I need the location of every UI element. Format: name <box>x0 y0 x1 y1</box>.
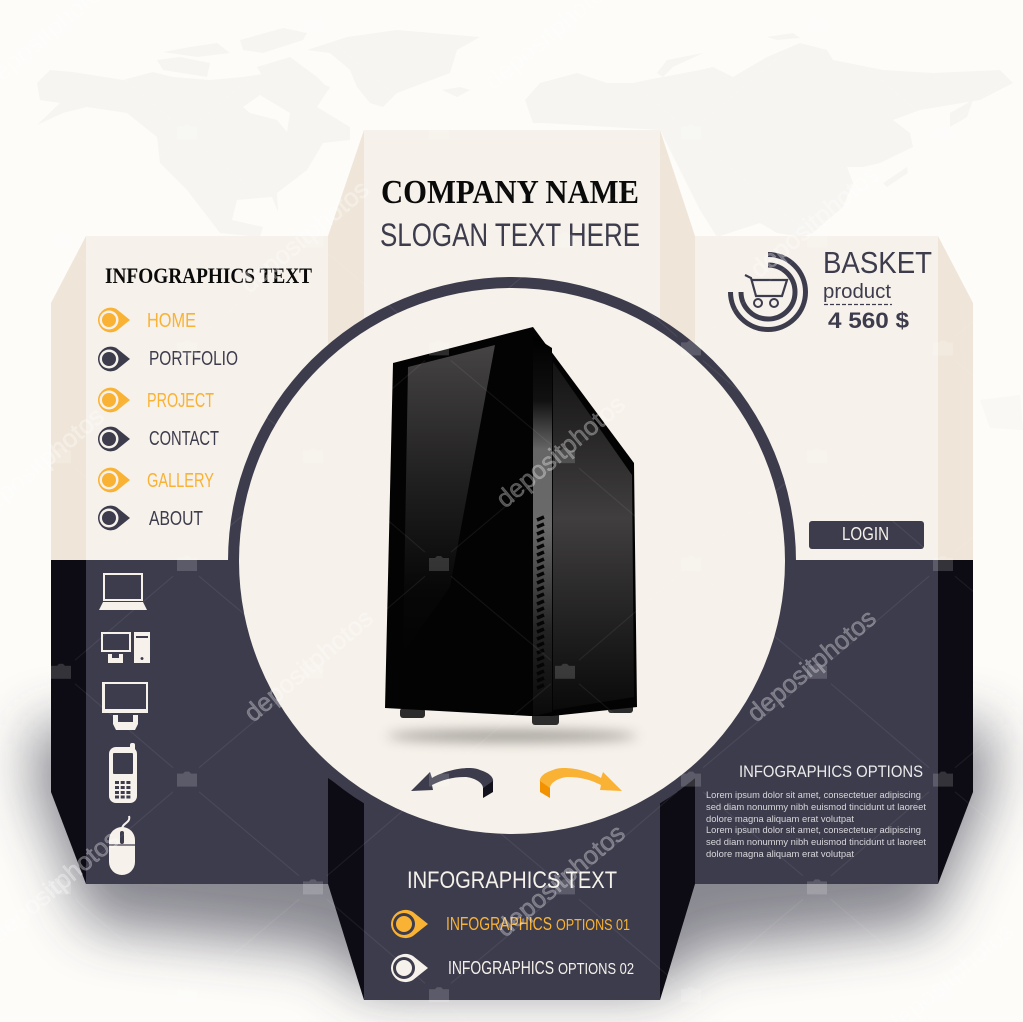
icon: monitor <box>102 682 148 730</box>
option 01: OPTIONS 01 <box>556 917 630 934</box>
computer tower <box>385 327 637 725</box>
option 02 <box>391 954 634 982</box>
hudson bay <box>243 95 290 132</box>
menu item: portfolio <box>98 347 238 371</box>
icon: shopping basket <box>730 254 806 330</box>
watermarks: depositphotos <box>491 819 631 943</box>
dashed divider <box>824 304 892 306</box>
text block: infographics options: Lorem ipsum dolor sit amet, consectetuer adipiscing <box>706 790 921 801</box>
heading: bottom panel: INFOGRAPHICS TEXT <box>407 867 617 894</box>
central circle <box>228 277 796 845</box>
option 02: OPTIONS 02 <box>558 961 634 978</box>
menu item: gallery <box>98 468 214 492</box>
menu item: gallery: GALLERY <box>147 470 214 492</box>
menu item: about: ABOUT <box>149 508 203 530</box>
panel: top centre <box>328 130 695 430</box>
floor shadow <box>35 725 990 990</box>
icon: mobile phone <box>109 743 137 803</box>
arrow: left navy <box>411 768 493 798</box>
menu item: about <box>98 506 203 530</box>
arrow: right orange <box>540 768 622 798</box>
watermarks: depositphotos <box>239 604 379 728</box>
text block: infographics options: dolore magna aliquam erat volutpat <box>706 849 854 860</box>
text block: infographics options: sed diam nonummy nibh euismod tincidunt ut laoreet <box>706 802 926 813</box>
option 01: INFOGRAPHICS <box>446 914 552 934</box>
icon: laptop <box>99 573 147 610</box>
menu item: portfolio: PORTFOLIO <box>149 348 238 370</box>
text block: infographics options <box>706 762 926 860</box>
icon: desktop and phone <box>101 632 150 663</box>
icon: mouse <box>109 816 135 875</box>
panel: left lower <box>51 560 328 884</box>
basket heading: BASKET <box>823 245 932 280</box>
watermarks: depositphotos <box>742 604 882 728</box>
text block: infographics options: Lorem ipsum dolor sit amet, consectetuer adipiscing <box>706 825 921 836</box>
basket product label: product <box>823 281 891 303</box>
menu item: project: PROJECT <box>147 390 214 412</box>
text block: infographics options: INFOGRAPHICS OPTIONS <box>739 762 923 781</box>
panel: right lower <box>695 560 973 884</box>
menu item: project <box>98 388 214 412</box>
login button <box>809 521 924 549</box>
slogan: SLOGAN TEXT HERE <box>380 217 640 253</box>
menu item: home: HOME <box>147 310 196 332</box>
login button: LOGIN <box>842 524 889 544</box>
text block: infographics options: dolore magna aliquam erat volutpat <box>706 814 854 825</box>
watermarks: depositphotos <box>745 160 885 284</box>
panel: left upper <box>51 236 328 560</box>
option 02: INFOGRAPHICS <box>448 958 554 978</box>
menu item: contact: CONTACT <box>149 428 219 450</box>
watermarks: depositphotos <box>491 390 631 514</box>
text block: infographics options: sed diam nonummy nibh euismod tincidunt ut laoreet <box>706 837 926 848</box>
title: COMPANY NAME <box>381 174 639 211</box>
menu item: home <box>98 308 196 332</box>
world map <box>37 28 1023 430</box>
option 01 <box>391 910 630 938</box>
watermarks: depositphotos <box>235 175 375 299</box>
basket price: 4 560 $ <box>828 308 909 333</box>
panel: bottom centre <box>328 560 695 1000</box>
product shadow <box>387 730 637 742</box>
menu item: contact <box>98 427 219 451</box>
heading: left menu: INFOGRAPHICS TEXT <box>105 263 312 288</box>
panel: right upper <box>695 236 973 560</box>
